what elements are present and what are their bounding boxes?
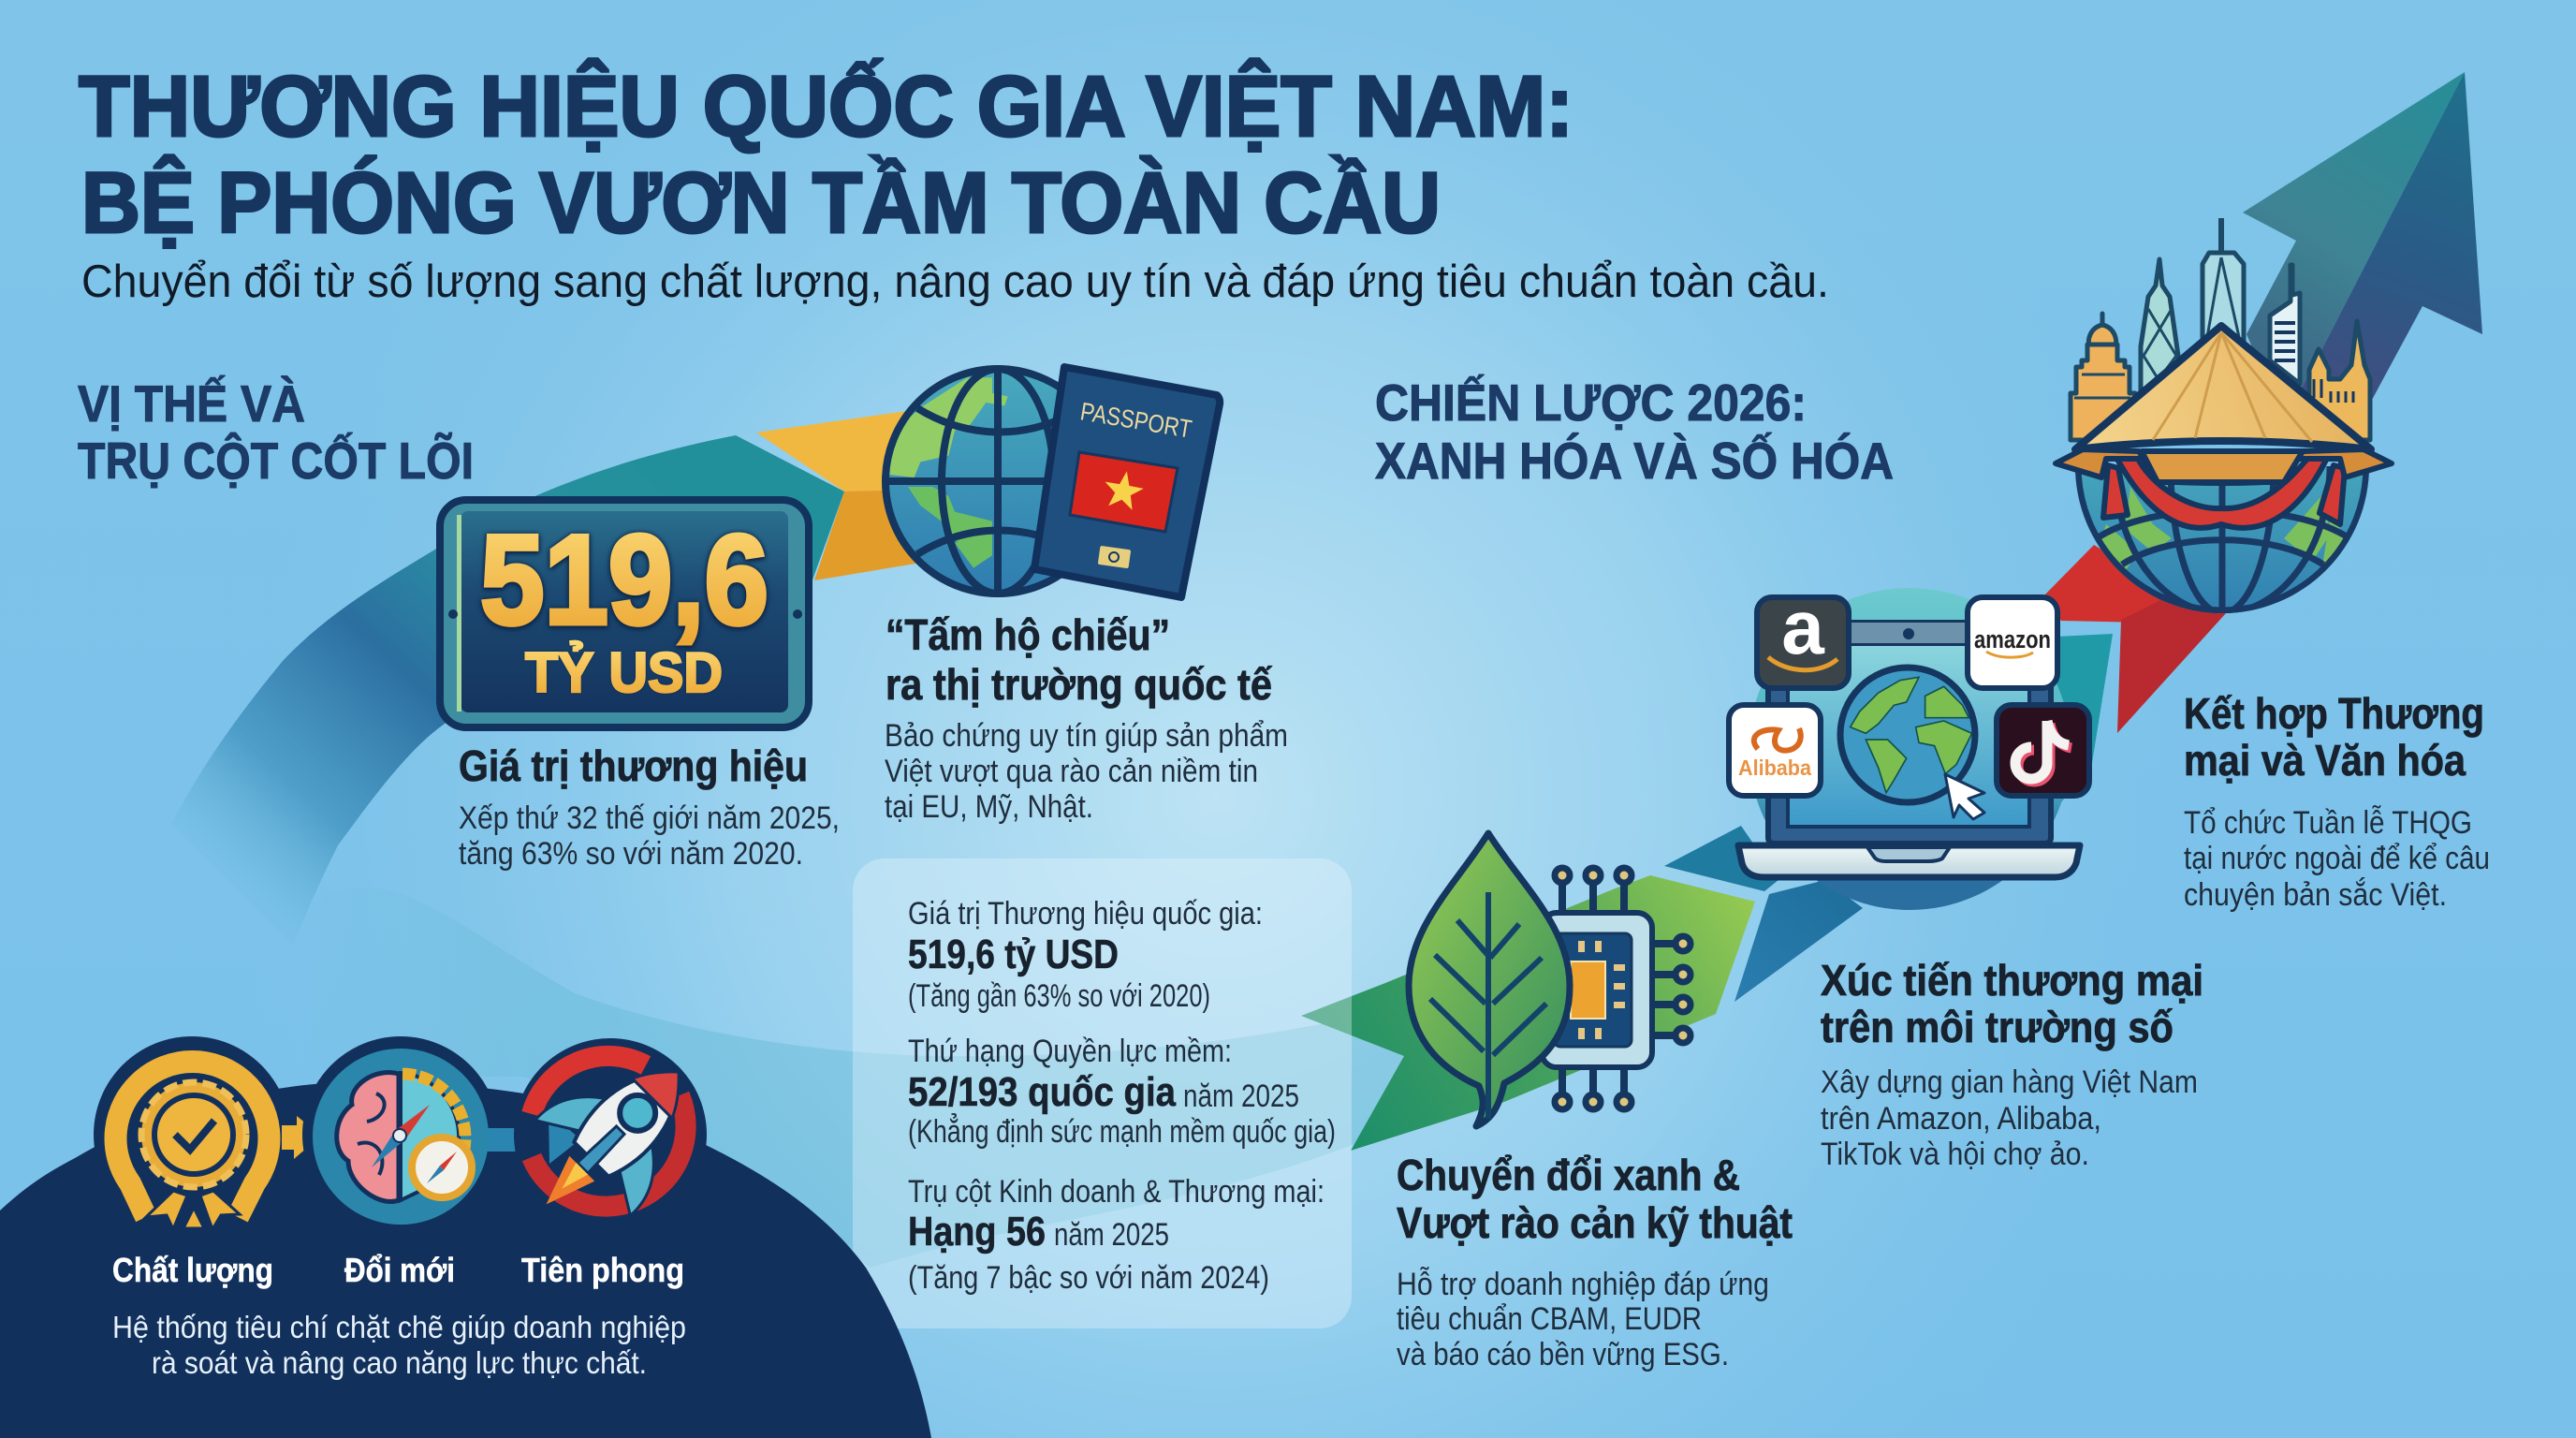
text: passport heading: ra thị trường quốc tế (886, 660, 1272, 709)
metric: soft power rank: (Khẳng định sức mạnh mềm quốc gia) (908, 1114, 1336, 1150)
text: trade and culture: mại và Văn hóa (2184, 736, 2466, 785)
pillar labels: Chất lượng (112, 1251, 273, 1289)
section heading: strategy 2026: CHIẾN LƯỢC 2026: (1375, 374, 1807, 432)
section heading: position and pillars: TRỤ CỘT CỐT LÕI (78, 432, 474, 490)
text: green transition: Vượt rào cản kỹ thuật (1397, 1198, 1793, 1247)
text: digital trade promotion: trên môi trường số (1821, 1003, 2174, 1051)
globe (2075, 466, 2369, 613)
text: passport heading (886, 610, 1272, 709)
pillar labels (112, 1251, 684, 1289)
amazon dark tile (1757, 585, 1849, 688)
amazon dark tile: a (1781, 585, 1825, 670)
arrow: green section (1301, 875, 1755, 1151)
metric: soft power rank: 52/193 quốc gia (908, 1069, 1176, 1115)
text: green transition: tiêu chuẩn CBAM, EUDR (1397, 1301, 1702, 1337)
text: brand value: Xếp thứ 32 thế giới năm 2025, (459, 800, 840, 836)
plaque: 519,6 billion USD: TỶ USD (525, 641, 723, 704)
arrow: rising arrowhead (2243, 72, 2482, 421)
panel: key figures background (853, 858, 1352, 1328)
icon: skyline, conical hat and globe (2056, 218, 2392, 627)
conical hat (2056, 326, 2392, 483)
section heading: strategy 2026 (1375, 374, 1894, 490)
section heading: position and pillars (78, 374, 474, 490)
panel text: key figures (908, 896, 1336, 1296)
navy hill (0, 1081, 931, 1438)
metric: national brand value: (Tăng gần 63% so với 2020) (908, 978, 1210, 1014)
icon: quality medal (94, 1036, 321, 1233)
metric: national brand value: 519,6 tỷ USD (908, 932, 1119, 977)
metric: business and trade pillar: Hạng 56 (908, 1209, 1046, 1255)
text: green transition: Hỗ trợ doanh nghiệp đáp ứng (1397, 1267, 1769, 1302)
text: brand value: tăng 63% so với năm 2020. (459, 836, 803, 872)
text: criteria description (112, 1310, 686, 1380)
alibaba tile: Alibaba (1738, 756, 1811, 780)
passport (1034, 367, 1220, 597)
text: brand value: Giá trị thương hiệu (459, 741, 808, 790)
cursor (1945, 774, 1984, 819)
metric: national brand value: Giá trị Thương hiệu quốc gia: (908, 896, 1263, 932)
arrow: gold section (756, 411, 927, 580)
section heading: strategy 2026: XANH HÓA VÀ SỐ HÓA (1375, 432, 1894, 490)
arrow: teal wedge behind laptop (2041, 634, 2113, 829)
icon: pioneer rocket (499, 1024, 726, 1252)
icon: globe and passport (886, 367, 1220, 597)
text: digital trade promotion: Xây dựng gian hàng Việt Nam (1821, 1064, 2198, 1100)
section heading: position and pillars: VỊ THẾ VÀ (78, 374, 305, 433)
pillar labels: Tiên phong (521, 1251, 684, 1289)
text: passport heading: “Tấm hộ chiếu” (886, 610, 1170, 659)
text: passport description: Việt vượt qua rào cản niềm tin (885, 754, 1258, 789)
arrow: red section (2043, 545, 2226, 733)
icon: leaf and chip (1409, 833, 1690, 1126)
metric: soft power rank (908, 1034, 1336, 1150)
text: trade and culture: Kết hợp Thương (2184, 689, 2484, 738)
amazon white tile: amazon (1974, 625, 2051, 653)
metric: business and trade pillar: (Tăng 7 bậc so với năm 2024) (908, 1260, 1269, 1296)
text: passport description (885, 718, 1288, 825)
globe (882, 365, 1061, 597)
connector arrow to rocket (487, 1111, 580, 1164)
text: digital trade promotion (1821, 956, 2203, 1172)
metric: business and trade pillar: năm 2025 (1054, 1217, 1169, 1253)
pale swoosh band (271, 888, 1404, 1268)
text: trade and culture (2184, 689, 2490, 913)
icon: laptop with marketplaces (1729, 585, 2089, 910)
text: green transition: Chuyển đổi xanh & (1397, 1151, 1740, 1199)
ribbon (2103, 452, 2345, 528)
globe on screen (1840, 668, 1975, 802)
text: trade and culture: chuyện bản sắc Việt. (2184, 877, 2447, 913)
text: brand value (459, 741, 840, 872)
plaque: 519,6 billion USD (440, 500, 809, 727)
text: digital trade promotion: Xúc tiến thương mại (1821, 956, 2203, 1005)
title: THƯƠNG HIỆU QUỐC GIA VIỆT NAM: (79, 58, 1573, 154)
text: digital trade promotion: TikTok và hội chợ ảo. (1821, 1137, 2089, 1172)
text: digital trade promotion: trên Amazon, Alibaba, (1821, 1101, 2101, 1137)
metric: soft power rank: năm 2025 (1183, 1078, 1299, 1114)
arrow: blue section (1664, 826, 1863, 1002)
plaque: 519,6 billion USD: 519,6 (480, 508, 768, 651)
metric: soft power rank: Thứ hạng Quyền lực mềm: (908, 1034, 1232, 1069)
skyline (2071, 218, 2370, 440)
text: passport description: tại EU, Mỹ, Nhật. (885, 789, 1093, 825)
subtitle: Chuyển đổi từ số lượng sang chất lượng, nâng cao uy tín và đáp ứng tiêu chuẩn toàn cầu. (81, 257, 1829, 307)
metric: business and trade pillar: Trụ cột Kinh doanh & Thương mại: (908, 1174, 1325, 1210)
text: trade and culture: tại nước ngoài để kể câu (2184, 841, 2490, 876)
text: criteria description: rà soát và nâng cao năng lực thực chất. (152, 1345, 647, 1380)
alibaba tile (1729, 705, 1821, 796)
metric: business and trade pillar (908, 1174, 1325, 1296)
text: trade and culture: Tổ chức Tuần lễ THQG (2184, 805, 2472, 841)
title: BỆ PHÓNG VƯƠN TẦM TOÀN CẦU (81, 154, 1441, 251)
text: passport description: Bảo chứng uy tín giúp sản phẩm (885, 718, 1288, 754)
arrow: teal curved section (171, 435, 844, 946)
passport: PASSPORT (1078, 397, 1193, 444)
metric: national brand value (908, 896, 1263, 1014)
text: criteria description: Hệ thống tiêu chí chặt chẽ giúp doanh nghiệp (112, 1310, 686, 1344)
title (79, 58, 1573, 251)
icon: innovation brain and compass (302, 1036, 499, 1233)
text: green transition: và báo cáo bền vững ESG. (1397, 1337, 1729, 1372)
text: green transition (1397, 1151, 1793, 1372)
amazon white tile (1968, 597, 2057, 688)
pillar labels: Đổi mới (344, 1251, 455, 1289)
tiktok tile (1997, 705, 2089, 796)
